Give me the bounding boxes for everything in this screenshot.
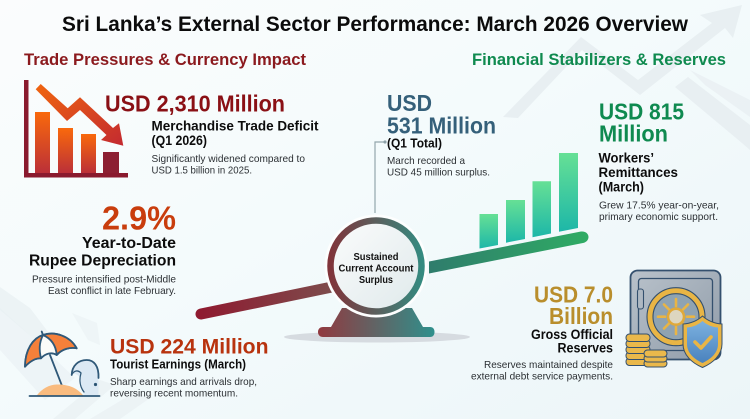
scale base — [318, 308, 434, 337]
text block: current account total: (Q1 Total) — [387, 137, 442, 151]
text block: reserves: Reserves — [558, 340, 613, 355]
heading: trade pressures: Trade Pressures & Currency Impact — [24, 50, 306, 69]
text block: tourist earnings: Tourist Earnings (March) — [110, 358, 246, 372]
text block: rupee depreciation: Year-to-Date — [82, 235, 176, 252]
text block: reserves: Reserves maintained despite — [484, 359, 613, 371]
title: Sri Lanka’s External Sector Performance: March 2026 Overview — [62, 12, 688, 36]
text block: tourist earnings: USD 224 Million — [110, 335, 268, 358]
scale shadow — [284, 332, 470, 342]
text block: remittances: Remittances — [598, 165, 678, 180]
safe body — [630, 270, 720, 360]
text block: trade deficit: Significantly widened compared to — [152, 153, 305, 165]
center label: Sustained — [354, 252, 398, 263]
text block: tourist earnings — [110, 335, 268, 400]
beam: left — [201, 287, 332, 314]
text block: remittances: Workers’ — [598, 150, 654, 165]
icon: beach umbrella and wave — [25, 332, 100, 396]
text block: remittances: Grew 17.5% year-on-year, — [599, 199, 719, 211]
coins — [626, 334, 667, 367]
center label — [338, 252, 414, 286]
heading: financial stabilizers: Financial Stabilizers & Reserves — [472, 50, 726, 69]
text block: trade deficit — [105, 90, 319, 176]
text block: current account total: 531 Million — [387, 112, 496, 138]
text block: reserves: Billion — [549, 303, 613, 329]
text block: rupee depreciation: 2.9% — [102, 200, 176, 236]
text block: trade deficit: USD 1.5 billion in 2025. — [152, 164, 252, 176]
text block: remittances: primary economic support. — [599, 211, 718, 223]
shield — [683, 316, 722, 368]
text block: current account total: March recorded a — [387, 155, 465, 167]
text block: current account total — [387, 90, 496, 178]
text block: remittances: USD 815 — [599, 98, 684, 124]
text block: remittances — [598, 98, 719, 223]
connector line — [375, 141, 386, 213]
center label: Current Account — [338, 264, 414, 275]
text block: reserves: USD 7.0 — [534, 281, 613, 307]
beam: right — [429, 231, 588, 274]
text block: rupee depreciation: East conflict in late February. — [48, 285, 176, 297]
text block: rupee depreciation — [29, 200, 176, 297]
text block: trade deficit: USD 2,310 Million — [105, 90, 285, 116]
center label: Surplus — [359, 275, 393, 286]
text block: rupee depreciation: Pressure intensified post-Middle — [32, 274, 176, 286]
text block: tourist earnings: Sharp earnings and arrivals drop, — [110, 376, 257, 388]
scale ring — [324, 214, 428, 318]
text block: current account total: USD — [387, 90, 432, 116]
text block: reserves: external debt service payments. — [471, 370, 613, 382]
text block: trade deficit: Merchandise Trade Deficit — [152, 118, 319, 134]
vault dial — [647, 288, 705, 346]
icon: falling bar chart — [24, 80, 128, 178]
text block: rupee depreciation: Rupee Depreciation — [29, 252, 176, 270]
text block: trade deficit: (Q1 2026) — [152, 133, 207, 148]
text block: tourist earnings: reversing recent momentum. — [110, 388, 238, 400]
text block: remittances: (March) — [598, 180, 644, 195]
rising green bars — [480, 153, 578, 248]
text block: remittances: Million — [599, 121, 668, 147]
balance scale — [201, 214, 588, 342]
text block: current account total: USD 45 million surplus. — [387, 166, 490, 178]
icon: safe with shield and coins — [626, 270, 722, 368]
text block: reserves: Gross Official — [531, 327, 613, 342]
text block: reserves — [471, 281, 613, 382]
